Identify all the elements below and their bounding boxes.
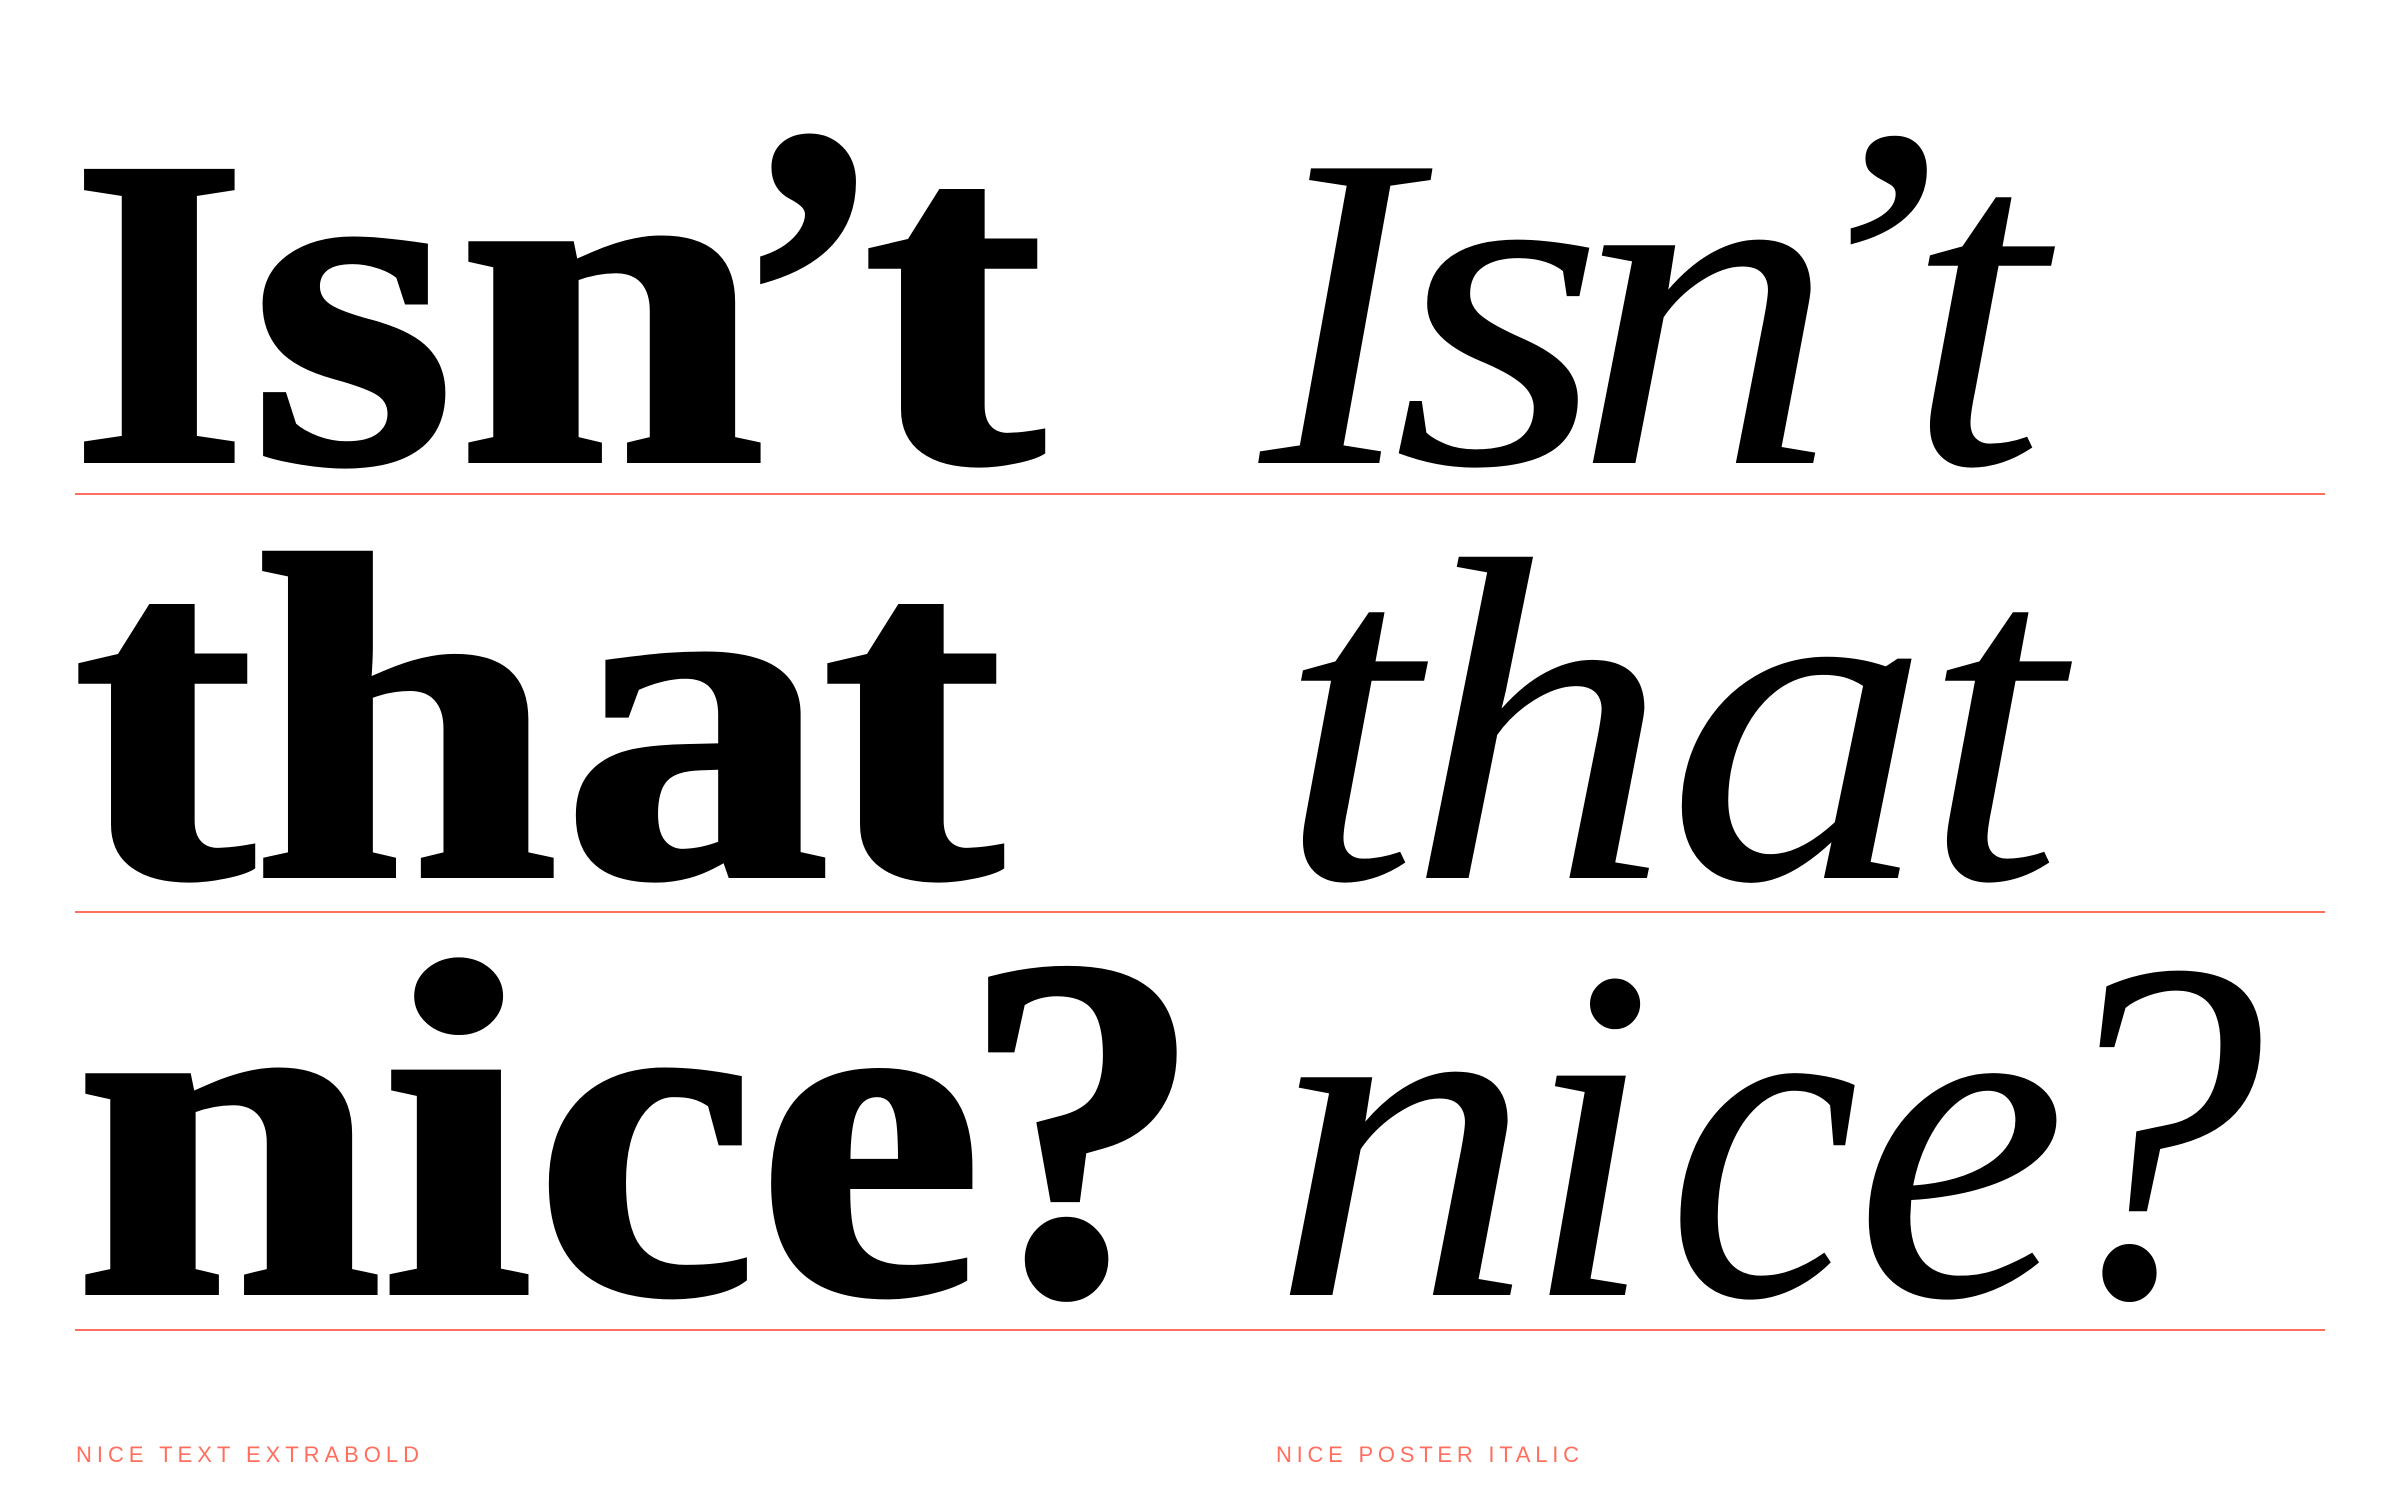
word: nice? italic: n <box>1271 874 1534 1398</box>
word: Isn't italic: s <box>1392 42 1606 566</box>
word: that extrabold: t <box>822 450 1009 978</box>
word: Isn't italic: I <box>1253 62 1434 561</box>
caption: Nice Text Extrabold: NICE TEXT EXTRABOLD <box>76 1442 419 1467</box>
word: nice? extrabold: e <box>757 873 982 1394</box>
word: Isn't extrabold <box>72 30 1050 563</box>
word: Isn't extrabold: I <box>72 69 247 556</box>
word: that extrabold: a <box>562 457 830 978</box>
word: nice? italic: ? <box>2034 858 2264 1401</box>
word: that italic: t <box>1923 459 2079 981</box>
word: Isn't italic: n <box>1574 42 1837 566</box>
word: Isn't italic: ’ <box>1777 40 1942 509</box>
word: that italic: t <box>1279 459 1435 981</box>
word: Isn't extrabold: ’ <box>735 30 886 557</box>
word: nice? extrabold: ? <box>962 857 1202 1398</box>
word: that italic <box>1279 459 2079 981</box>
word: nice? italic: i <box>1523 869 1654 1399</box>
word: nice? extrabold: i <box>381 867 533 1396</box>
word: nice? italic: e <box>1854 875 2067 1397</box>
word: nice? extrabold: n <box>74 874 382 1394</box>
word: Isn't extrabold: t <box>863 35 1050 563</box>
word: that italic: a <box>1666 460 1932 980</box>
word: nice? extrabold <box>74 857 1202 1398</box>
word: Isn't italic: t <box>1906 44 2062 566</box>
word: Isn't italic <box>1253 40 2062 566</box>
word: nice? extrabold: c <box>535 873 756 1394</box>
word: nice? italic: c <box>1667 876 1859 1397</box>
word: Isn't extrabold: n <box>457 42 765 562</box>
word: nice? italic <box>1271 858 2264 1401</box>
caption: Nice Poster Italic: NICE POSTER ITALIC <box>1276 1442 1579 1467</box>
word: that extrabold: h <box>252 464 558 976</box>
word: that italic: h <box>1407 467 1671 979</box>
word: Isn't extrabold: s <box>250 42 455 563</box>
word: that extrabold: t <box>73 450 260 978</box>
word: that extrabold <box>73 450 1009 978</box>
